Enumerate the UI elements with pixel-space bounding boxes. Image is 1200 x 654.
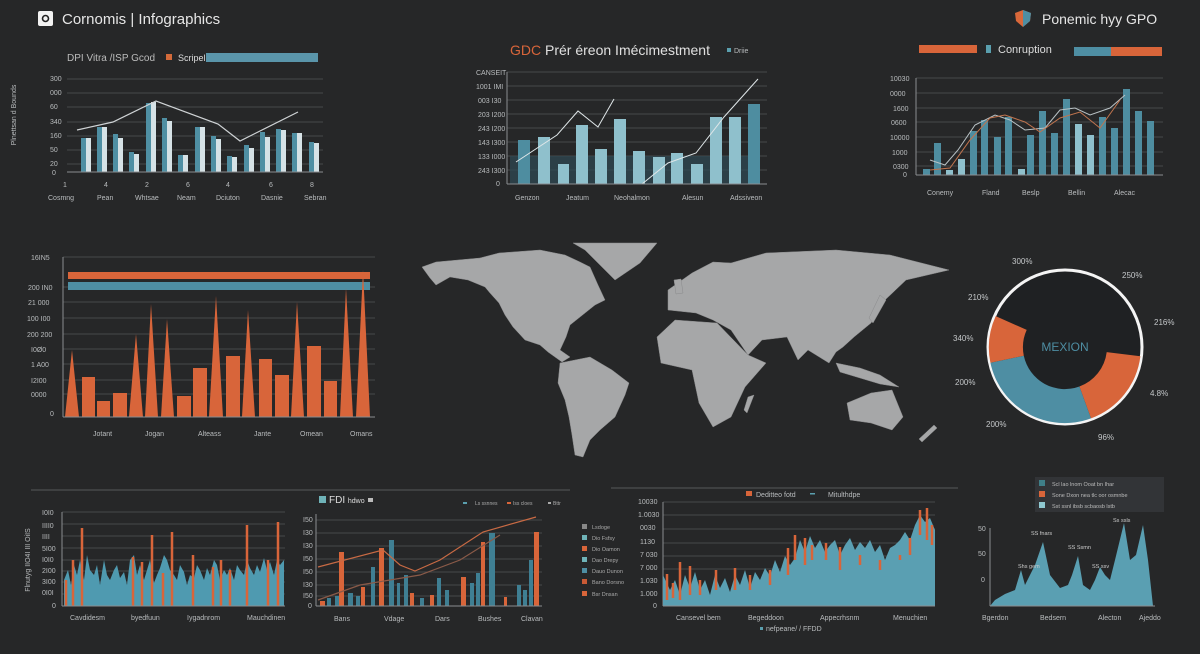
panel: top-left grouped bar chart: 6 [186, 182, 190, 189]
panel: orange spike chart: Omans [350, 431, 373, 438]
title: GDC Prér éreon Imécimestment [510, 42, 710, 58]
legend: category list: Dio Oamon [592, 547, 620, 553]
horizontal summary bars [68, 272, 370, 290]
percent labels: 250% [1122, 271, 1142, 280]
panel: bottom-right peaks chart: 0 [981, 577, 985, 584]
panel: top-left grouped bar chart: Whtsae [135, 195, 159, 202]
chart title and legend: Scripel [178, 53, 206, 63]
teal bars [327, 533, 533, 606]
title and legend: Ls ssnnes [475, 501, 498, 507]
panel: bottom FDI chart: Bans [334, 616, 350, 623]
percent labels: 200% [986, 420, 1006, 429]
panel: bottom-middle area/bar chart: nefpeane/ / FFDD [766, 626, 822, 633]
panel: bottom-middle area/bar chart: 7 030 [640, 552, 658, 559]
panel: orange spike chart: Alteass [198, 431, 221, 438]
legend: category list: Dio Fsfsy [592, 536, 615, 542]
panel: orange spike chart: 200 IN0 [28, 285, 53, 292]
panel: bottom-left dense bar chart: 0I0I [42, 590, 54, 597]
percent labels: 96% [1098, 433, 1114, 442]
panel: top-middle GDC investment chart [476, 42, 767, 202]
panel: top-middle GDC investment chart: Adssiveon [730, 195, 762, 202]
peak labels: Shs gem [1018, 564, 1040, 570]
panel: top-left grouped bar chart: Plnettsan d Bounds [11, 84, 18, 145]
panel: top-right corruption bar chart [890, 44, 1163, 197]
panel: top-right corruption bar chart: 10030 [890, 76, 910, 83]
title and legend [319, 495, 561, 507]
panel: top-right corruption bar chart: 0300 [893, 164, 909, 171]
panel: bottom-right peaks chart: Alecton [1098, 615, 1121, 622]
legend: category list: Lsdoge [592, 525, 610, 531]
panel: bottom-middle area/bar chart: 10030 [638, 499, 658, 506]
panel: bottom FDI chart: 0 [308, 603, 312, 610]
panel: top-middle GDC investment chart: Genzon [515, 195, 540, 202]
panel: bottom-middle area/bar chart: 1.030 [640, 578, 658, 585]
panel: bottom-middle area/bar chart: 1.0030 [638, 512, 660, 519]
panel: top-left grouped bar chart: 60 [50, 104, 58, 111]
panel: bottom FDI chart: I30 [303, 530, 313, 537]
panel: bottom-left dense bar chart: Flnutyg IIO4I III OiIS [25, 528, 32, 592]
panel: bottom FDI chart: I30 [303, 582, 313, 589]
legend bars: Conruption [998, 44, 1052, 56]
chart title and legend [67, 53, 318, 64]
panel: top-middle GDC investment chart: 003 I30 [478, 98, 501, 105]
percent labels: 4.8% [1150, 389, 1168, 398]
panel: top-left grouped bar chart: 2 [145, 182, 149, 189]
percent labels: 210% [968, 293, 988, 302]
segment: left orange [989, 316, 1027, 363]
panel: top-left grouped bar chart: 000 [50, 90, 62, 97]
panel: bottom FDI chart: Clavan [521, 616, 543, 623]
panel: bottom FDI chart: Vdage [384, 616, 404, 623]
header: brand: Cornomis | Infographics [62, 11, 220, 28]
panel: bottom-right peaks chart [978, 477, 1164, 622]
panel: orange spike chart: 0 [50, 411, 54, 418]
peak labels: Ss ssls [1113, 518, 1131, 524]
legend: category list [582, 524, 624, 598]
panel: bottom-middle area/bar chart: 0030 [640, 525, 656, 532]
percent labels: 340% [953, 334, 973, 343]
panel: top-right corruption bar chart: 0 [903, 172, 907, 179]
panel: bottom-right peaks chart: Ajeddo [1139, 615, 1161, 622]
panel: top-right corruption bar chart: 1600 [893, 106, 909, 113]
legend box: Sone Dxon nea tlc oor osmnbe [1052, 493, 1128, 499]
panel: bottom-left dense bar chart: 0 [52, 603, 56, 610]
panel: top-middle GDC investment chart: 203 I200 [478, 112, 505, 119]
legend: category list: Dauo Dunon [592, 569, 623, 575]
panel: top-left grouped bar chart: 300 [50, 76, 62, 83]
panel: top-right corruption bar chart: Conemy [927, 190, 954, 197]
panel: orange spike chart: 200 200 [27, 332, 52, 339]
trend lines [516, 79, 758, 184]
panel: bottom-left dense bar chart: 2I00 [42, 568, 56, 575]
segment: right orange [1079, 352, 1140, 418]
panel: top-left grouped bar chart: 340 [50, 119, 62, 126]
panel: orange spike chart: 1 A00 [31, 362, 49, 369]
panel: top-left grouped bar chart: 50 [50, 147, 58, 154]
panel: top-middle GDC investment chart: Jeatum [566, 195, 589, 202]
legend bars [919, 44, 1162, 56]
legend: category list: Bsr Dnsan [592, 592, 618, 598]
panel: top-middle GDC investment chart: 243 I300 [478, 168, 505, 175]
panel: top-right corruption bar chart: Alecac [1114, 190, 1136, 197]
panel: top-left grouped bar chart: Cosmng [48, 195, 74, 202]
panel: bottom-middle area/bar chart [638, 491, 935, 633]
panel: top-right corruption bar chart: Fland [982, 190, 1000, 197]
trend lines [930, 95, 1125, 170]
panel: bottom-right peaks chart: 50 [978, 551, 986, 558]
bars [923, 89, 1154, 175]
panel: orange spike chart: Jotant [93, 431, 112, 438]
panel: bottom FDI chart: I50 [303, 556, 313, 563]
panel: top-right corruption bar chart: Bellin [1068, 190, 1085, 197]
panel: orange spike chart [27, 255, 375, 438]
panel: bottom-left dense bar chart: Mauchdinen [247, 615, 285, 622]
peak labels: SS fnars [1031, 531, 1052, 537]
panel: orange spike chart: 100 I00 [27, 316, 50, 323]
percent labels: 200% [955, 378, 975, 387]
legend box [1035, 477, 1164, 512]
panel: bottom-middle area/bar chart: Cansevel bem [676, 615, 721, 622]
orange spikes [66, 522, 278, 606]
panel: bottom-middle area/bar chart: Begeddoon [748, 615, 784, 622]
panel: top-middle GDC investment chart: 133 I000 [478, 154, 505, 161]
peak labels [1018, 518, 1131, 570]
panel: bottom-middle area/bar chart: Mitulthdpe [828, 492, 860, 499]
panel: bottom-middle area/bar chart: Deditteo fotd [756, 492, 796, 499]
panel: bottom-left dense bar chart: I0I0 [42, 557, 54, 564]
blue dense bars [64, 555, 284, 606]
panel: top-middle GDC investment chart: 243 I200 [478, 126, 505, 133]
panel: orange spike chart: Jante [254, 431, 271, 438]
panel: top-left grouped bar chart: 1 [63, 182, 67, 189]
world map [422, 243, 949, 457]
percent labels: 300% [1012, 257, 1032, 266]
panel: bottom-left dense bar chart: IIII0 [42, 523, 54, 530]
percent labels: 216% [1154, 318, 1174, 327]
title and legend: FDI hdwo [329, 495, 365, 506]
panel: top-left grouped bar chart: 160 [50, 133, 62, 140]
title and legend: Iss cloes [513, 501, 533, 507]
panel: bottom-left dense bar chart: 5I00 [42, 546, 56, 553]
panel: top-left grouped bar chart: 4 [226, 182, 230, 189]
panel: top-middle GDC investment chart: 143 I300 [478, 140, 505, 147]
panel: orange spike chart: I0Ø0 [31, 347, 46, 354]
bars [81, 102, 319, 172]
panel: bottom-middle area/bar chart: 1130 [640, 539, 655, 546]
panel: top-right corruption bar chart: 0000 [890, 91, 906, 98]
peak labels: SS Ssmn [1068, 545, 1091, 551]
panel: bottom FDI chart [303, 495, 561, 623]
spikes and bars [65, 270, 370, 417]
panel: bottom-middle area/bar chart: Appecrhsnm [820, 615, 859, 622]
percent labels [953, 257, 1174, 442]
panel: top-middle GDC investment chart: 0 [496, 181, 500, 188]
panel: bottom-left dense bar chart [25, 510, 285, 622]
panel: bottom FDI chart: I50 [303, 569, 313, 576]
panel: bottom-right peaks chart: Bedsern [1040, 615, 1066, 622]
panel: bottom-right peaks chart: Bgerdon [982, 615, 1009, 622]
panel: bottom-left dense bar chart: byedfuun [131, 615, 160, 622]
panel: top-middle GDC investment chart: Neohalmon [614, 195, 650, 202]
panel: orange spike chart: Jogan [145, 431, 164, 438]
panel: top-right corruption bar chart: Beslp [1022, 190, 1040, 197]
bars [518, 104, 760, 184]
panel: orange spike chart: Omean [300, 431, 323, 438]
panel: bottom FDI chart: Bushes [478, 616, 502, 623]
legend box: Scl lao lnom Ooat bn Ihar [1052, 482, 1114, 488]
panel: top-left grouped bar chart: Dciuton [216, 195, 240, 202]
legend: category list: Bano Dorsno [592, 580, 624, 586]
panel: bottom-middle area/bar chart: 1.000 [640, 591, 658, 598]
panel: top-middle GDC investment chart: 1001 IMI [476, 84, 503, 91]
panel: top-left grouped bar chart: 6 [269, 182, 273, 189]
header: right brand with shield icon: Ponemic hyy GPO [1042, 11, 1157, 27]
divider rules bottom [31, 489, 570, 491]
panel: top-left grouped bar chart: Pean [97, 195, 113, 202]
donut chart: Mexion: MEXION [1041, 340, 1089, 354]
panel: top-middle GDC investment chart: Driie [734, 48, 748, 55]
panel: top-left grouped bar chart: 20 [50, 161, 58, 168]
panel: top-left grouped bar chart: 8 [310, 182, 314, 189]
peak labels: SS ssv [1092, 564, 1109, 570]
panel: orange spike chart: I2I00 [31, 378, 47, 385]
donut chart: Mexion [953, 257, 1174, 442]
panel: bottom FDI chart: I30 [303, 543, 313, 550]
panel: top-right corruption bar chart: 0600 [891, 120, 907, 127]
title and legend: Bttr [553, 501, 561, 507]
panel: orange spike chart: 16IN5 [31, 255, 50, 262]
panel: bottom-left dense bar chart: Cavdidesm [70, 615, 105, 622]
panel: orange spike chart: 21 000 [28, 300, 50, 307]
trend lines [318, 517, 536, 600]
chart title and legend: DPI Vitra /ISP Gcod [67, 53, 155, 64]
panel: bottom-left dense bar chart: Iygadnrom [187, 615, 220, 622]
panel: bottom FDI chart: I50 [303, 593, 313, 600]
panel: top-left grouped bar chart: Neam [177, 195, 196, 202]
panel: bottom-left dense bar chart: I0I0 [42, 510, 54, 517]
panel: top-left grouped bar chart: Dasnie [261, 195, 283, 202]
panel: orange spike chart: 0000 [31, 392, 47, 399]
legend: category list: Dao Drepy [592, 558, 619, 564]
panel: top-left grouped bar chart: Sebran [304, 195, 327, 202]
trend line [77, 101, 298, 141]
panel: bottom FDI chart: I50 [303, 517, 313, 524]
panel: bottom-middle area/bar chart: Menuchien [893, 615, 927, 622]
panel: top-left grouped bar chart: 0 [52, 170, 56, 177]
panel: top-left grouped bar chart [11, 53, 327, 202]
panel: bottom-right peaks chart: 50 [978, 526, 986, 533]
panel: bottom-middle area/bar chart: 7 000 [640, 565, 658, 572]
legend box: Sst ssnl ibsb scbaosb lstb [1052, 504, 1115, 510]
segment: blue [990, 356, 1091, 423]
panel: top-middle GDC investment chart: CANSEIT [476, 70, 507, 77]
panel: bottom-left dense bar chart: IIII [42, 534, 50, 541]
panel: bottom-middle area/bar chart: 0 [653, 603, 657, 610]
panel: top-middle GDC investment chart: Alesun [682, 195, 704, 202]
background band [510, 156, 760, 184]
panel: bottom-left dense bar chart: 3I00 [42, 579, 56, 586]
panel: top-right corruption bar chart: 10000 [890, 135, 910, 142]
orange bars [320, 532, 539, 606]
panel: top-left grouped bar chart: 4 [104, 182, 108, 189]
panel: top-right corruption bar chart: 1000 [892, 150, 908, 157]
panel: bottom FDI chart: Dars [435, 616, 450, 623]
